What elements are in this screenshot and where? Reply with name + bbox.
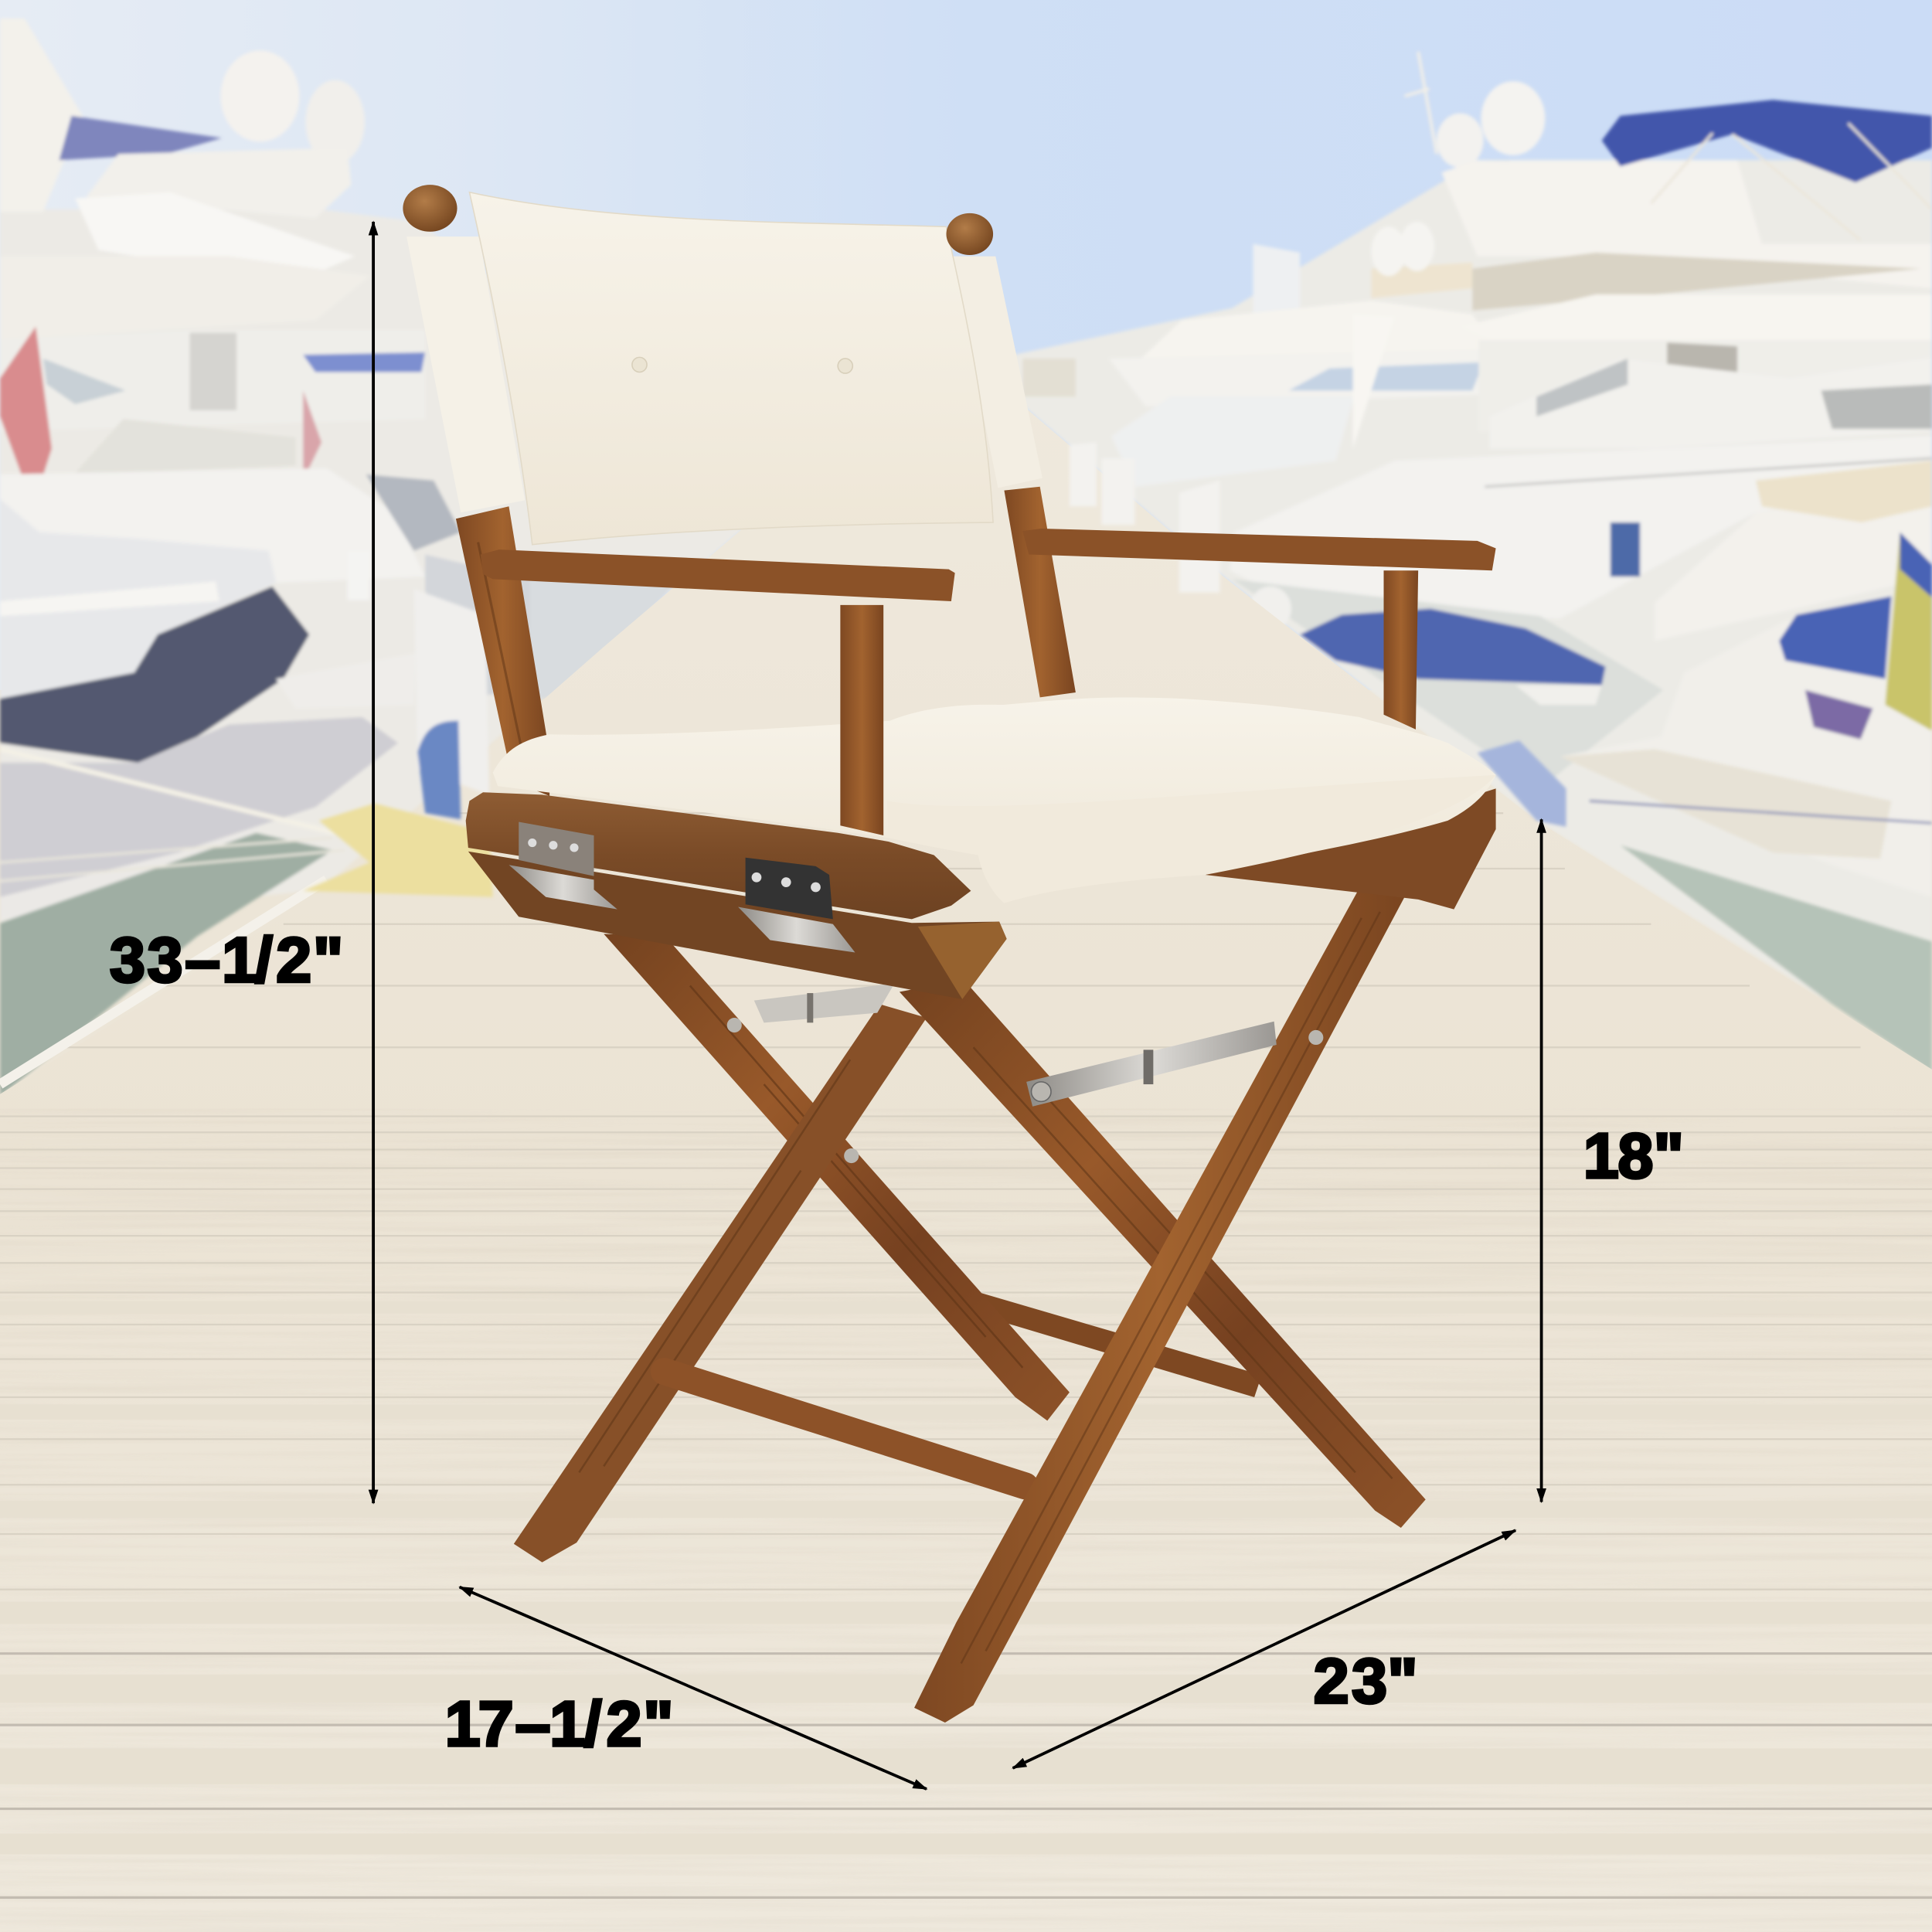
dimension arrow: seat height bbox=[1540, 819, 1543, 1502]
sleeve, right bbox=[951, 257, 1043, 488]
deck edge rim bbox=[0, 879, 327, 1084]
back post, right bbox=[1004, 487, 1076, 697]
front crossing leg, long bbox=[900, 980, 1426, 1528]
seat rail, lower front bbox=[468, 852, 1007, 999]
dimension arrow: depth bbox=[460, 1587, 927, 1789]
dimension arrow: width bbox=[1013, 1530, 1515, 1768]
background: yellow rope coil bbox=[303, 804, 493, 897]
front crossing leg, right bbox=[914, 866, 1406, 1723]
steel brace, left bbox=[727, 983, 895, 1163]
back post, left bbox=[456, 506, 549, 796]
armrest, left bbox=[481, 549, 955, 601]
label: depth: 17–1/2" bbox=[445, 1688, 674, 1760]
background: right yachts bbox=[974, 52, 1932, 1072]
knob, right bbox=[946, 213, 993, 255]
background: left yachts bbox=[0, 19, 764, 1097]
seat rail end bbox=[918, 922, 1007, 999]
seat cushion bbox=[493, 698, 1496, 903]
backrest cushion bbox=[469, 192, 993, 545]
hinge, right bbox=[738, 858, 855, 952]
armrest, right bbox=[1022, 529, 1496, 570]
dimension arrow: overall height bbox=[372, 222, 374, 1503]
label: width: 23" bbox=[1314, 1645, 1418, 1716]
background: blue fender bbox=[1478, 740, 1566, 827]
label: overall height: 33–1/2" bbox=[110, 924, 343, 996]
knob, left bbox=[403, 185, 457, 232]
rear crossing leg, right bbox=[514, 1004, 927, 1563]
chair bbox=[403, 185, 1496, 1723]
background: marina sky bbox=[0, 0, 1932, 690]
sleeve, left bbox=[406, 236, 525, 512]
arm upright, right bbox=[1383, 570, 1418, 730]
rear crossing leg, left bbox=[604, 934, 1070, 1420]
rear stretcher bbox=[966, 1290, 1262, 1397]
label: seat height: 18" bbox=[1583, 1120, 1684, 1192]
background: dock pedestals bbox=[414, 442, 1219, 819]
steel brace, right bbox=[1026, 1022, 1323, 1107]
back cushion with side sleeves bbox=[406, 192, 1043, 545]
hinge, left bbox=[509, 821, 617, 910]
front stretcher bbox=[664, 1372, 1026, 1486]
arm upright, left bbox=[840, 605, 883, 835]
deck plank texture bbox=[0, 813, 1932, 1932]
seat rail, upper front bbox=[466, 792, 971, 919]
tufting buttons bbox=[632, 357, 647, 372]
seat rail, right side bbox=[1205, 788, 1496, 910]
cushion front shading bbox=[887, 775, 1496, 903]
